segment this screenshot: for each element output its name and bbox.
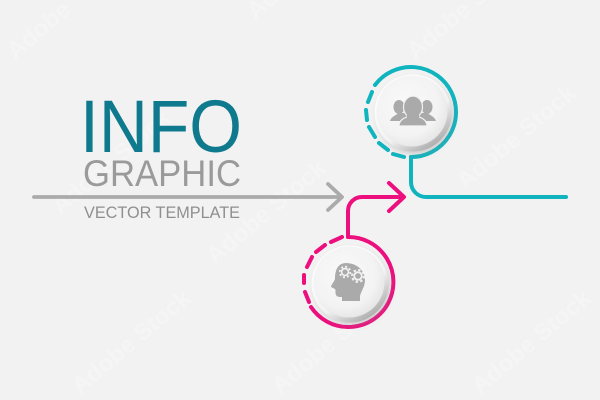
infographic canvas: Adobe Stock [47, 104, 177, 220]
title: INFO: INFO [80, 85, 242, 168]
teal ring and connector [366, 67, 566, 197]
subtitle: VECTOR TEMPLATE: VECTOR TEMPLATE [84, 203, 240, 222]
disc [374, 74, 453, 154]
infographic canvas: Adobe Stock [67, 284, 197, 400]
icon: people [390, 96, 436, 126]
disc [312, 246, 390, 325]
infographic canvas: Adobe Stock [467, 284, 597, 400]
title: GRAPHIC: GRAPHIC [83, 153, 241, 194]
pink ring and connector [304, 183, 404, 327]
infographic canvas: Adobe Stock [452, 79, 582, 195]
step 2: pink circle with head icon [304, 183, 404, 327]
arrow: grey [34, 184, 342, 210]
infographic canvas: Adobe Stock [202, 154, 332, 270]
infographic canvas: Adobe Stock [267, 284, 397, 400]
icon: head with gears [331, 263, 365, 301]
step 1: teal circle with people icon [366, 67, 566, 197]
